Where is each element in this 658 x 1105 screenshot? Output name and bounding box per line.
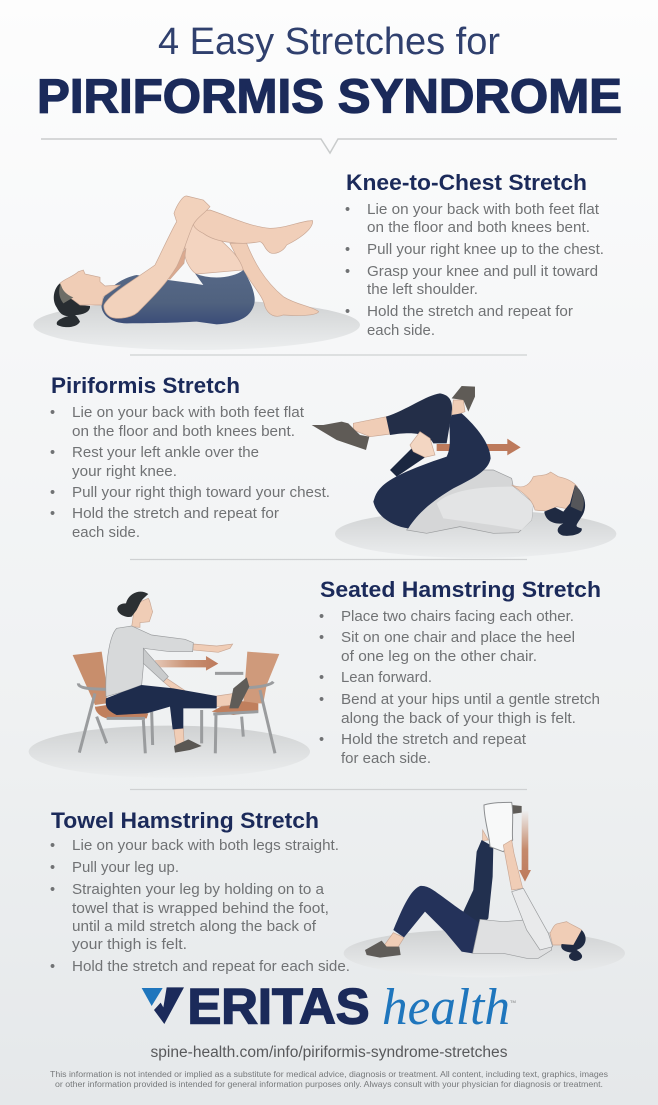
logo: Veritas Health: TM [510,999,516,1004]
illustration: knee-to-chest [33,196,360,350]
title: PIRIFORMIS SYNDROME [37,70,622,124]
bullet list: • [50,860,55,876]
bullet list: on the floor and both knees bent. [367,220,590,236]
bullet list: Pull your leg up. [72,860,179,876]
bullet list: Straighten your leg by holding on to a [72,882,325,898]
logo: Veritas Health: ERITAS [188,978,370,1034]
bullet list: Pull your right thigh toward your chest. [72,485,330,501]
bullet list: Lean forward. [341,670,432,686]
disclaimer [50,1070,608,1089]
bullet list: Rest your left ankle over the [72,445,259,461]
bullet list: Bend at your hips until a gentle stretch [341,692,600,708]
disclaimer: or other information provided is intended for general information purposes only. Always consult with your physician for diagnosis or treatment. [55,1080,603,1089]
bullet list: • [319,630,324,646]
bullet list: • [345,304,350,320]
bullet list: each side. [367,323,435,339]
logo: Veritas Health: health [382,979,510,1036]
panel: piriformis stretch [50,373,616,558]
bullet list: until a mild stretch along the back of [72,919,317,935]
panel: seated hamstring stretch [29,577,601,778]
bullet list: Lie on your back with both feet flat [367,202,599,218]
panel: towel hamstring stretch [50,802,625,977]
bullet list: each side. [72,525,140,541]
bullet list: towel that is wrapped behind the foot, [72,901,329,917]
heading: Piriformis Stretch [51,373,240,398]
bullet list: Lie on your back with both feet flat [72,405,304,421]
bullet list: • [319,609,324,625]
bullet list [319,609,600,767]
bullet list: Place two chairs facing each other. [341,609,574,625]
bullet list: Sit on one chair and place the heel [341,630,575,646]
bullet list [345,202,604,339]
bullet list: on the floor and both knees bent. [72,424,295,440]
illustration: towel hamstring [344,802,625,977]
bullet list: • [319,692,324,708]
bullet list: • [50,445,55,461]
bullet list: • [50,882,55,898]
bullet list: Hold the stretch and repeat for each side. [72,959,350,975]
bullet list: • [319,670,324,686]
bullet list: • [50,506,55,522]
heading: Towel Hamstring Stretch [51,808,319,833]
bullet list: Hold the stretch and repeat for [367,304,573,320]
panel: knee-to-chest stretch [33,170,604,350]
bullet list: • [345,242,350,258]
logo: Veritas Health [142,978,516,1036]
illustration: piriformis [312,386,616,558]
bullet list: along the back of your thigh is felt. [341,711,576,727]
bullet list: your thigh is felt. [72,937,187,953]
bullet list: Pull your right knee up to the chest. [367,242,604,258]
bullet list: • [345,202,350,218]
bullet list: for each side. [341,751,431,767]
bullet list [50,405,330,541]
bullet list: • [319,732,324,748]
heading: Seated Hamstring Stretch [320,577,601,602]
title [37,21,622,124]
bullet list: Lie on your back with both legs straight. [72,838,339,854]
bullet list: • [50,959,55,975]
bullet list: the left shoulder. [367,282,478,298]
bullet list: • [345,264,350,280]
bullet list: your right knee. [72,464,177,480]
bullet list: Grasp your knee and pull it toward [367,264,598,280]
bullet list: • [50,838,55,854]
bullet list: Hold the stretch and repeat [341,732,526,748]
bullet list: of one leg on the other chair. [341,649,537,665]
bullet list: • [50,405,55,421]
disclaimer: This information is not intended or implied as a substitute for medical advice, diagnosis or treatment. All content, including text, graphics, images [50,1070,608,1079]
bullet list: • [50,485,55,501]
title: 4 Easy Stretches for [158,21,500,63]
source url: spine-health.com/info/piriformis-syndrome-stretches [150,1044,508,1061]
bullet list [50,838,350,975]
heading: Knee-to-Chest Stretch [346,170,587,195]
logo mark [142,987,184,1024]
illustration: seated hamstring [29,592,310,778]
bullet list: Hold the stretch and repeat for [72,506,279,522]
